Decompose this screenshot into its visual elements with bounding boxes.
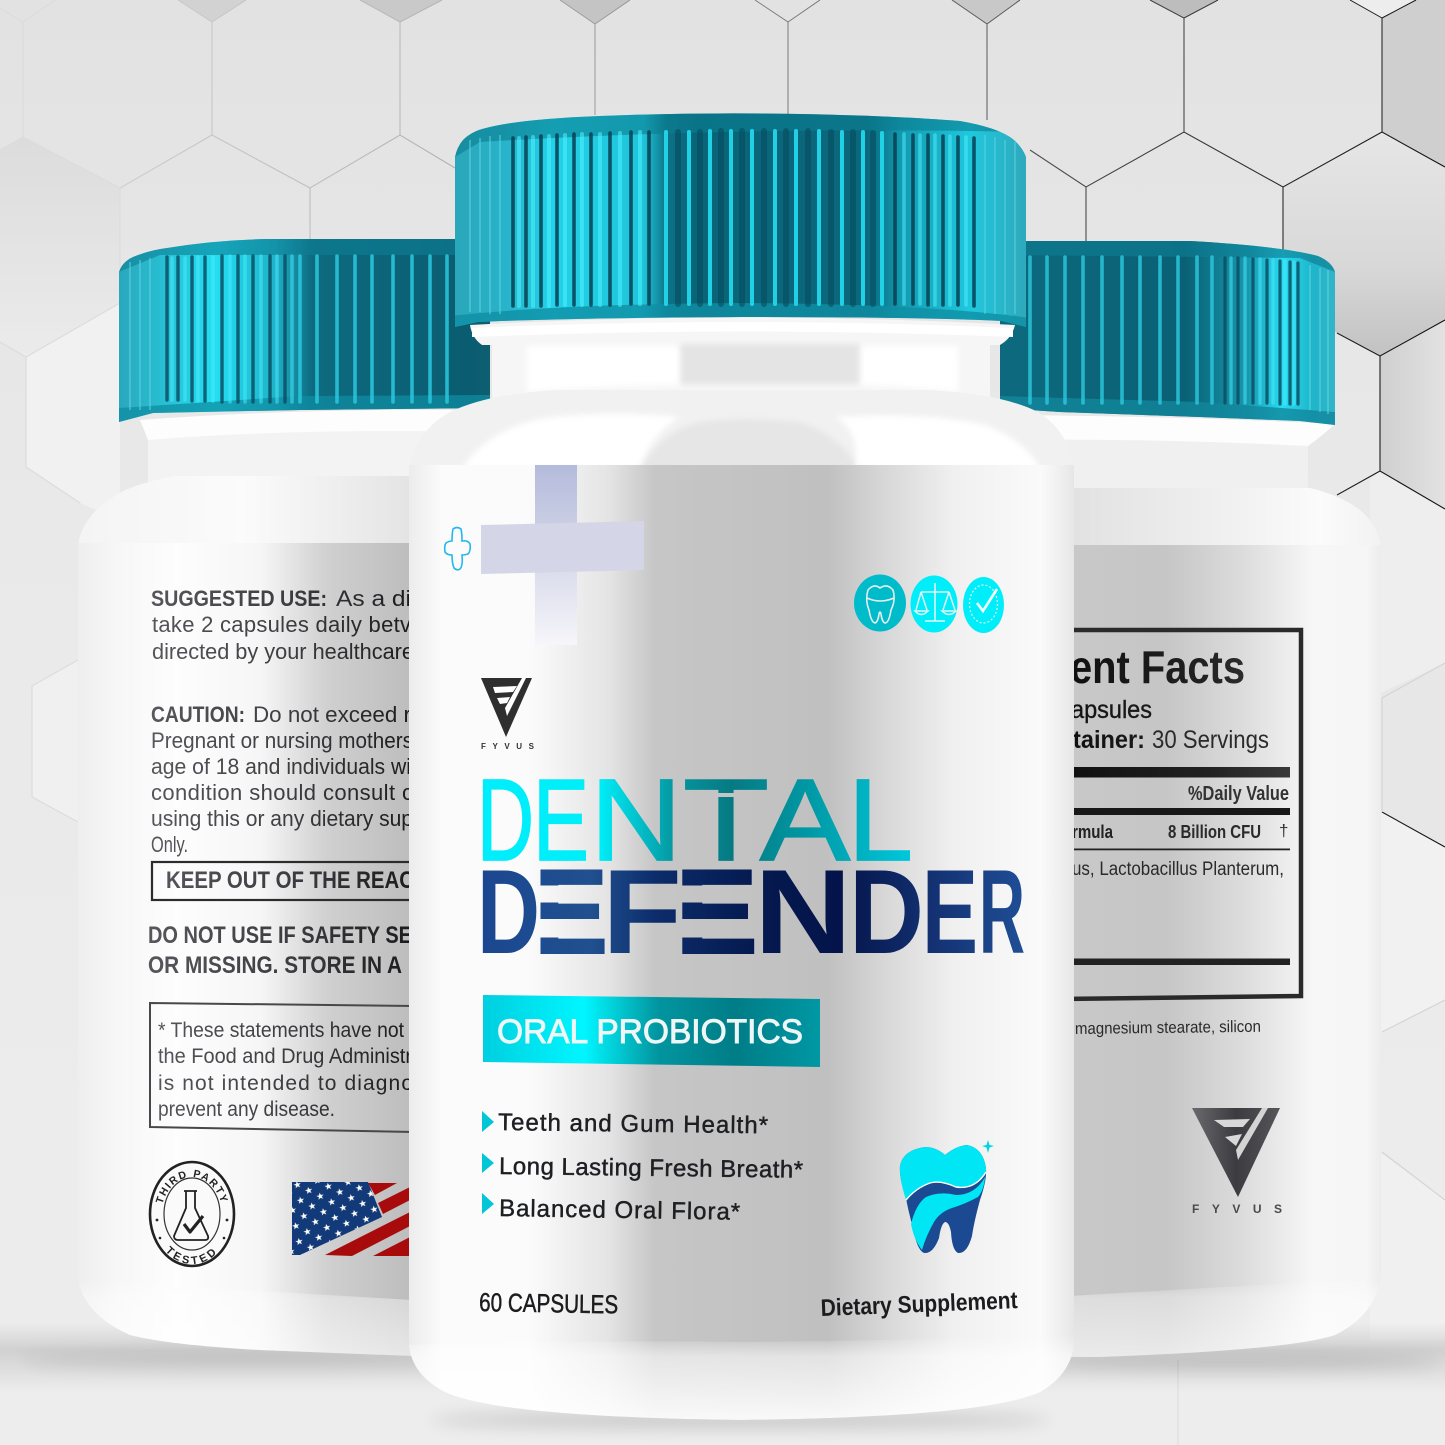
front bottle body (409, 465, 1074, 1420)
left bottle neck (148, 425, 480, 500)
disclaimer box: * These statements have not (158, 1019, 404, 1042)
bullet: oral flora: Balanced Oral Flora* (499, 1195, 740, 1226)
label: benefit icons (854, 574, 1004, 633)
caution text: Pregnant or nursing mothers (151, 728, 413, 753)
left bottle base highlight (78, 1280, 412, 1356)
supplement facts panel: ent Facts (1070, 641, 1245, 693)
third party tested seal: TESTED (166, 1246, 215, 1264)
title: dental: N (590, 755, 682, 885)
safety warning text: DO NOT USE IF SAFETY SE (148, 922, 412, 949)
safety warning text: OR MISSING. STORE IN A (148, 952, 402, 979)
supplement facts panel: us, Lactobacillus Planterum, (1072, 859, 1284, 880)
benefits list (482, 1109, 803, 1226)
banner: oral probiotics: ORAL PROBIOTICS (497, 1013, 803, 1051)
caution text: Do not exceed r (253, 702, 411, 727)
caution text: age of 18 and individuals wi (151, 754, 411, 779)
disclaimer box: the Food and Drug Administr (158, 1045, 412, 1068)
supplement facts panel: rmula (1072, 822, 1114, 842)
usa flag (292, 1182, 412, 1256)
supplement facts panel: apsules (1071, 696, 1152, 724)
title: defender: E (534, 845, 608, 979)
right cap (1000, 241, 1335, 446)
right bottle neck (1000, 425, 1308, 500)
suggested use text: directed by your healthcare (152, 639, 414, 664)
caution text: CAUTION: (151, 702, 245, 727)
keep out of reach box (152, 862, 414, 900)
left bottle body (78, 543, 412, 1356)
supplement facts panel: † (1279, 821, 1288, 840)
caution text (151, 702, 413, 857)
disclaimer box (150, 1003, 414, 1132)
title: defender: E (922, 845, 978, 979)
title: dental: T (683, 755, 769, 885)
other ingredients text: magnesium stearate, silicon (1075, 1018, 1261, 1038)
supplement facts panel: tainer: (1073, 726, 1145, 754)
fyvus logo, right bottle: FYVUS (1192, 1202, 1282, 1216)
label: fyvus logo: FYVUS (481, 742, 535, 751)
label: small outlined cross (445, 528, 470, 570)
front bottle shoulder (409, 390, 1074, 472)
suggested use text (151, 586, 414, 664)
capsule count: 60 CAPSULES (479, 1287, 618, 1319)
title: defender: E (675, 845, 758, 979)
title: defender: D (477, 845, 540, 979)
safety warning text (148, 922, 412, 979)
icon: balance scale (910, 576, 958, 632)
front bottle base highlight (409, 1335, 1074, 1420)
title: defender: D (849, 845, 924, 979)
caution text: Only. (151, 832, 188, 857)
title: dental: E (533, 755, 589, 885)
supplement facts panel: 30 Servings (1152, 726, 1269, 754)
front cap (450, 110, 1030, 330)
suggested use text: As a di (336, 586, 411, 611)
supplement facts panel (1060, 630, 1301, 999)
title: defender: F (602, 845, 682, 979)
front bottle neck (470, 318, 1015, 400)
fyvus logo, right bottle (1192, 1108, 1282, 1216)
icon: clock check (963, 577, 1004, 633)
suggested use text: SUGGESTED USE: (151, 586, 327, 611)
supplement facts panel: 8 Billion CFU (1168, 822, 1261, 842)
title: dental: D (477, 755, 534, 885)
banner: oral probiotics (483, 995, 820, 1067)
left cap (119, 239, 490, 440)
floor shadow (0, 1322, 1445, 1429)
supplement facts panel: %Daily Value (1188, 783, 1289, 805)
left bottle shoulder (78, 476, 440, 546)
suggested use text: take 2 capsules daily betv (152, 612, 411, 637)
bullet: fresh breath: Long Lasting Fresh Breath* (499, 1153, 803, 1184)
front bottle (409, 110, 1074, 1420)
title: dental: L (848, 755, 913, 885)
keep out of reach box: KEEP OUT OF THE REAC (166, 867, 414, 894)
dietary supplement: Dietary Supplement (820, 1287, 1018, 1322)
right bottle base highlight (1000, 1278, 1381, 1357)
title: defender: R (979, 845, 1025, 979)
right bottle shoulder (1000, 488, 1381, 547)
third party tested seal: THIRD PARTY (156, 1170, 228, 1202)
right bottle (supplement facts) (1000, 241, 1381, 1357)
caution text: using this or any dietary sup (151, 806, 413, 831)
title: defender: N (754, 845, 852, 979)
flask icon (174, 1191, 208, 1240)
disclaimer box: is not intended to diagno (158, 1072, 413, 1095)
label: fyvus logo (481, 678, 535, 751)
icon: tooth (854, 574, 906, 632)
left bottle (back label) (78, 239, 490, 1356)
tooth logo (900, 1140, 994, 1253)
third party tested seal (148, 1160, 236, 1268)
bullet: teeth and gum health: Teeth and Gum Health* (498, 1109, 768, 1139)
label: large cross (481, 465, 644, 645)
right bottle body (1000, 545, 1381, 1357)
title: dental: A (760, 755, 851, 885)
caution text: condition should consult c (151, 780, 413, 805)
disclaimer box: prevent any disease. (158, 1098, 335, 1121)
